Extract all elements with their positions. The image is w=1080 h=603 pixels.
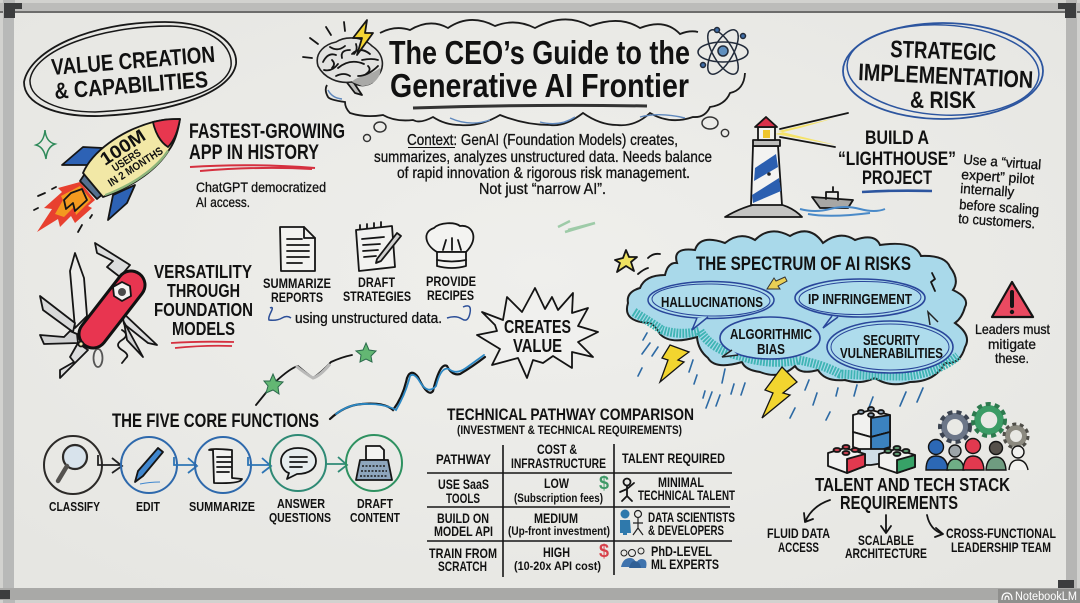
function: answer questions bbox=[269, 435, 331, 525]
table: technical pathway comparison: TOOLS bbox=[446, 490, 480, 506]
table: technical pathway comparison: SCRATCH bbox=[438, 558, 487, 574]
function: draft content: DRAFT bbox=[357, 496, 393, 511]
text: virtual expert pilot: to customers. bbox=[958, 210, 1036, 231]
title bbox=[389, 35, 690, 108]
requirement: scalable architecture: ARCHITECTURE bbox=[845, 545, 927, 561]
wave line to creates value bbox=[330, 355, 485, 419]
heading: talent and tech stack requirements: REQUIREMENTS bbox=[840, 492, 958, 513]
text: virtual expert pilot bbox=[958, 151, 1042, 231]
icon: lighthouse and ship bbox=[725, 113, 885, 217]
function: draft content: CONTENT bbox=[350, 510, 400, 525]
bubble: security vulnerabilities: SECURITY bbox=[863, 332, 920, 349]
text: virtual expert pilot: internally bbox=[960, 180, 1015, 200]
requirement: fluid data access bbox=[767, 525, 830, 555]
heading: five core functions: THE FIVE CORE FUNCTIONS bbox=[112, 411, 319, 432]
table: technical pathway comparison: & DEVELOPERS bbox=[648, 522, 724, 538]
risk cloud bbox=[627, 231, 967, 384]
icon: rain bbox=[638, 333, 923, 420]
heading: versatility through foundation models: VERSATILITY bbox=[154, 261, 253, 282]
table: technical pathway comparison: MEDIUM bbox=[534, 510, 578, 526]
icon: swiss army knife bbox=[40, 243, 157, 378]
table: technical pathway comparison: INFRASTRUCTURE bbox=[511, 455, 606, 471]
table: technical pathway comparison: PATHWAY bbox=[436, 451, 492, 467]
function: draft content bbox=[346, 435, 402, 525]
function: answer questions: QUESTIONS bbox=[269, 510, 331, 525]
requirement: scalable architecture: SCALABLE bbox=[858, 532, 914, 548]
text: ChatGPT democratized: AI access. bbox=[196, 194, 250, 210]
warning and leaders must mitigate: these. bbox=[995, 350, 1029, 366]
burst: creates value: VALUE bbox=[513, 336, 562, 356]
table: technical pathway comparison: $ bbox=[599, 541, 609, 561]
heading: spectrum of ai risks: THE SPECTRUM OF AI RISKS bbox=[696, 254, 911, 275]
warning and leaders must mitigate: Leaders must bbox=[975, 321, 1050, 337]
title: The CEO’s Guide to the bbox=[389, 35, 690, 72]
table: technical pathway comparison: $ bbox=[599, 473, 609, 493]
icon: stick figure bbox=[620, 478, 634, 501]
text: ChatGPT democratized: ChatGPT democratized bbox=[196, 179, 326, 195]
heading: technical pathway comparison: TECHNICAL PATHWAY COMPARISON bbox=[447, 406, 694, 424]
heading: talent and tech stack requirements: TALENT AND TECH STACK bbox=[815, 474, 1011, 495]
item: summarize reports bbox=[263, 227, 331, 305]
heading: versatility through foundation models: FOUNDATION bbox=[154, 299, 253, 320]
bubble: ip infringement: IP INFRINGEMENT bbox=[808, 291, 912, 308]
text: ChatGPT democratized bbox=[196, 179, 326, 210]
requirement: fluid data access: FLUID DATA bbox=[767, 525, 830, 541]
icon: brain with lightning bolt bbox=[303, 20, 382, 95]
table: technical pathway comparison: DATA SCIENTISTS bbox=[648, 509, 735, 525]
table: technical pathway comparison: COST & bbox=[537, 441, 577, 457]
icon: yellow arrow bbox=[767, 277, 787, 289]
heading: build a lighthouse project bbox=[838, 127, 956, 192]
title cloud bbox=[326, 19, 745, 142]
item: summarize reports: REPORTS bbox=[271, 290, 323, 305]
text: using unstructured data: using unstructured data. bbox=[295, 310, 442, 327]
table: technical pathway comparison: HIGH bbox=[543, 544, 570, 560]
item: summarize reports: SUMMARIZE bbox=[263, 276, 331, 291]
function: edit: EDIT bbox=[136, 499, 160, 514]
requirement: fluid data access: ACCESS bbox=[778, 539, 819, 555]
arrows from requirements bbox=[804, 500, 943, 537]
text: context bbox=[374, 132, 712, 198]
heading: fastest-growing app: FASTEST-GROWING bbox=[189, 120, 345, 143]
table: technical pathway comparison: TRAIN FROM bbox=[429, 545, 497, 561]
icon: rocket with 100M users: 100M bbox=[96, 125, 149, 169]
icon: star trail scribble bbox=[256, 221, 595, 405]
item: draft strategies bbox=[343, 222, 411, 304]
squiggle bbox=[931, 273, 935, 291]
function: edit bbox=[121, 437, 177, 514]
icon: rocket with 100M users: IN 2 MONTHS bbox=[106, 145, 165, 190]
oval heading: value creation and capabilities: VALUE CREATION bbox=[50, 41, 216, 80]
table: technical pathway comparison: MODEL API bbox=[434, 523, 493, 539]
table: technical pathway comparison: TALENT REQUIRED bbox=[622, 450, 725, 466]
table: technical pathway comparison: (10-20x API cost) bbox=[514, 559, 601, 573]
icon: green sparkle bbox=[36, 130, 55, 159]
bubble: ip infringement bbox=[795, 279, 925, 328]
table: technical pathway comparison: TECHNICAL TALENT bbox=[638, 487, 735, 503]
requirement: cross-functional leadership team bbox=[946, 525, 1056, 555]
icon: building blocks bbox=[828, 407, 915, 473]
icon: rocket with 100M users: USERS bbox=[110, 147, 143, 175]
heading: talent and tech stack requirements bbox=[815, 474, 1011, 513]
heading: build a lighthouse project: “LIGHTHOUSE” bbox=[838, 148, 956, 170]
bubble: hallucinations: HALLUCINATIONS bbox=[661, 294, 763, 311]
watermark: NotebookLM bbox=[998, 589, 1080, 603]
text: using unstructured data bbox=[269, 306, 470, 327]
item: draft strategies: DRAFT bbox=[358, 275, 396, 290]
heading: fastest-growing app bbox=[189, 120, 345, 171]
bubble: security vulnerabilities: VULNERABILITIES bbox=[840, 345, 943, 362]
icon: gears bbox=[940, 404, 1028, 448]
oval heading: strategic implementation and risk: IMPLEMENTATION bbox=[858, 59, 1034, 94]
icon: two people bbox=[620, 510, 643, 535]
table: technical pathway comparison: ML EXPERTS bbox=[651, 556, 719, 572]
text: context: of rapid innovation & rigorous risk management. bbox=[397, 165, 690, 182]
heading: versatility through foundation models: MODELS bbox=[172, 318, 235, 339]
arrow bbox=[325, 457, 347, 472]
heading: versatility through foundation models bbox=[154, 261, 253, 348]
function: classify: CLASSIFY bbox=[49, 499, 100, 514]
function: summarize bbox=[189, 437, 255, 514]
function: answer questions: ANSWER bbox=[277, 496, 326, 511]
table: technical pathway comparison: LOW bbox=[544, 475, 570, 491]
icon: expert group bbox=[621, 548, 646, 568]
text: context: summarizes, analyzes unstructured data. Needs balance bbox=[374, 149, 712, 166]
heading: versatility through foundation models: THROUGH bbox=[167, 280, 240, 301]
item: provide recipes: PROVIDE bbox=[426, 274, 476, 289]
text: virtual expert pilot: before scaling bbox=[959, 196, 1040, 218]
arrow bbox=[98, 455, 122, 473]
heading: build a lighthouse project: BUILD A bbox=[865, 127, 929, 149]
icon: yellow star and birds bbox=[615, 250, 660, 274]
warning and leaders must mitigate: mitigate bbox=[988, 336, 1036, 352]
arrow bbox=[174, 457, 197, 473]
bubble: hallucinations bbox=[648, 282, 774, 330]
warning and leaders must mitigate bbox=[975, 282, 1050, 366]
text: context: Not just “narrow AI”. bbox=[479, 181, 606, 198]
oval heading: strategic implementation and risk: & RISK bbox=[910, 87, 977, 114]
watermark: NotebookLM: NotebookLM bbox=[1015, 591, 1077, 603]
item: provide recipes bbox=[426, 223, 476, 303]
requirement: scalable architecture bbox=[845, 532, 927, 561]
bubble: algorithmic bias: BIAS bbox=[757, 341, 785, 358]
text: context: Context: GenAI (Foundation Models) creates, bbox=[407, 132, 678, 149]
table: technical pathway comparison: USE SaaS bbox=[438, 476, 489, 492]
table: technical pathway comparison bbox=[427, 441, 735, 577]
heading: build a lighthouse project: PROJECT bbox=[862, 167, 932, 189]
bubble: algorithmic bias: ALGORITHMIC bbox=[730, 326, 812, 343]
text: virtual expert pilot: Use a “virtual bbox=[963, 151, 1042, 172]
table: technical pathway comparison: BUILD ON bbox=[437, 510, 489, 526]
icon: team of people bbox=[926, 438, 1028, 470]
item: provide recipes: RECIPES bbox=[427, 288, 474, 303]
oval heading: value creation and capabilities bbox=[24, 22, 236, 116]
item: draft strategies: STRATEGIES bbox=[343, 289, 411, 304]
bubble: security vulnerabilities bbox=[827, 312, 953, 373]
burst: creates value bbox=[477, 288, 598, 378]
icon: rocket with 100M users bbox=[34, 119, 180, 232]
title: Generative AI Frontier bbox=[390, 68, 689, 105]
heading: fastest-growing app: APP IN HISTORY bbox=[189, 141, 319, 164]
function: classify bbox=[44, 436, 102, 514]
heading: technical pathway comparison bbox=[447, 406, 694, 437]
arrow bbox=[248, 457, 271, 473]
burst: creates value: CREATES bbox=[504, 317, 571, 337]
icon: lightning bolts bbox=[660, 345, 797, 418]
table: technical pathway comparison: PhD-LEVEL bbox=[651, 543, 712, 559]
table: technical pathway comparison: (Subscription fees) bbox=[514, 491, 603, 505]
text: virtual expert pilot: expert” pilot bbox=[961, 166, 1035, 187]
icon: atom bbox=[698, 25, 748, 79]
table: technical pathway comparison: (Up-front investment) bbox=[508, 524, 610, 538]
bubble: algorithmic bias bbox=[720, 317, 820, 359]
oval heading: strategic implementation and risk: STRATEGIC bbox=[890, 36, 997, 67]
function: summarize: SUMMARIZE bbox=[189, 499, 255, 514]
table: technical pathway comparison: MINIMAL bbox=[658, 474, 704, 490]
oval heading: value creation and capabilities: & CAPABILITIES bbox=[53, 66, 209, 104]
heading: technical pathway comparison: (INVESTMENT & TECHNICAL REQUIREMENTS) bbox=[457, 423, 682, 437]
oval heading: strategic implementation and risk bbox=[843, 20, 1043, 120]
